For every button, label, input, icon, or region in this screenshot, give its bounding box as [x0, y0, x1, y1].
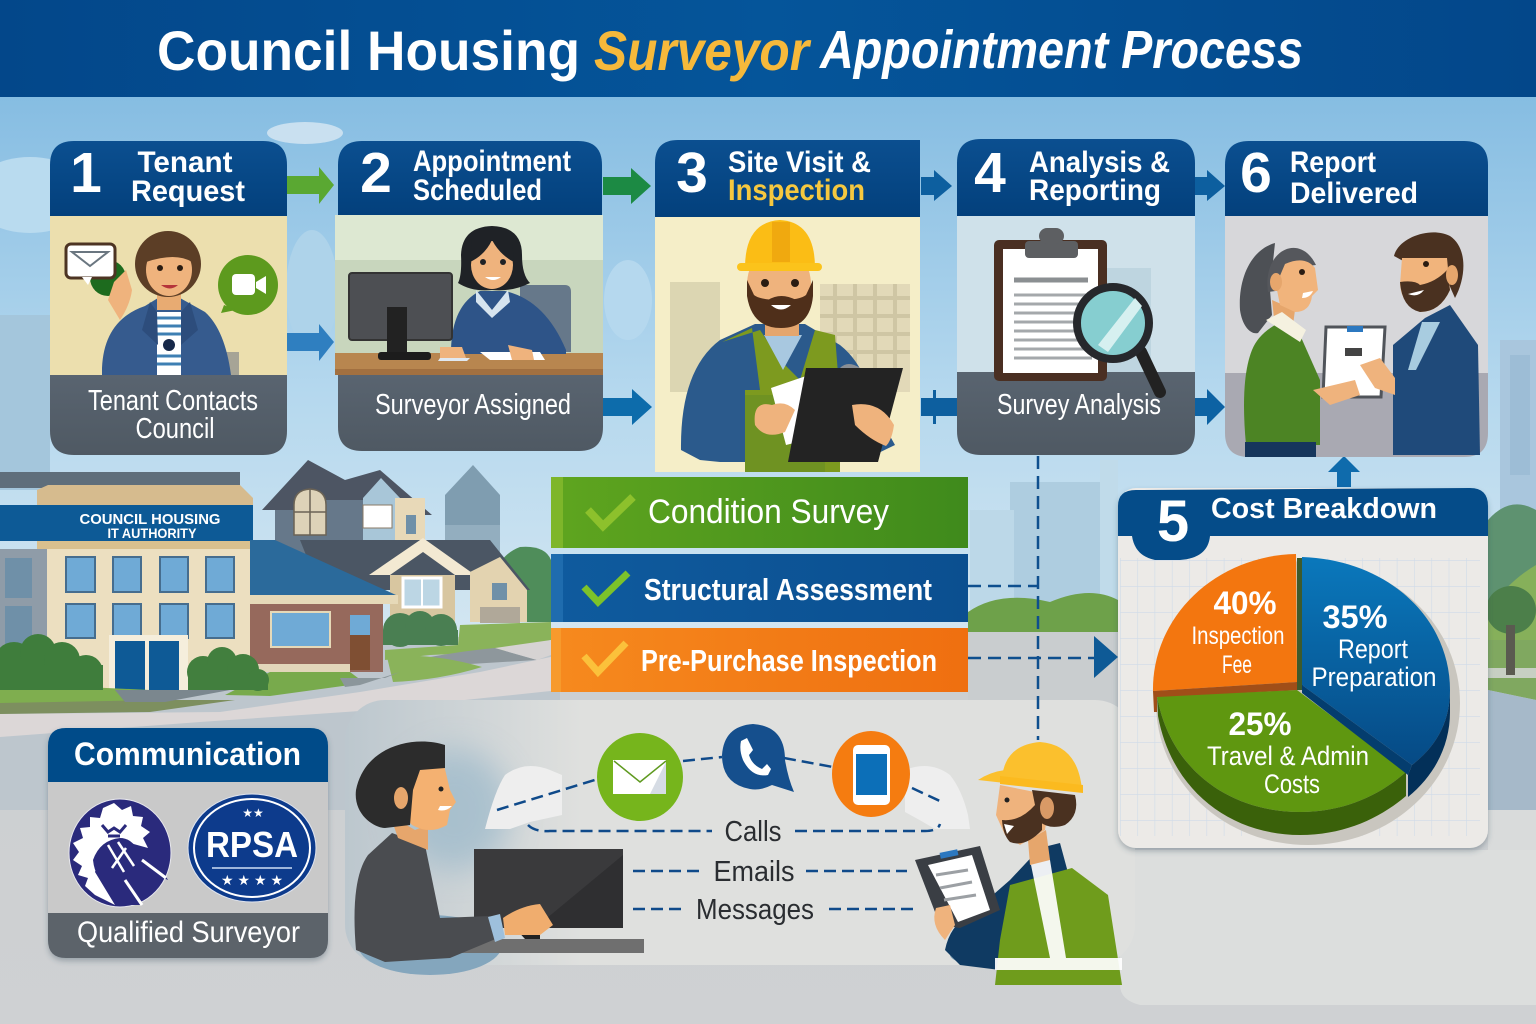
- step title: [728, 146, 871, 207]
- sign text: [80, 511, 220, 541]
- step number 5: 5: [1157, 489, 1189, 554]
- panel: inspection type list: [551, 477, 968, 692]
- title banner: [0, 0, 1536, 97]
- panel: step 2 appointment scheduled: [335, 141, 603, 451]
- step number 1: 1: [70, 141, 102, 205]
- road: [0, 637, 560, 810]
- step title: Analysis &: [1029, 146, 1170, 179]
- step title: [131, 146, 245, 208]
- badge: RPSA: RPSA: [206, 824, 298, 865]
- step number 2: 2: [360, 141, 392, 205]
- icon: surveyor at desk: [335, 226, 603, 375]
- caption: Tenant Contacts: [88, 385, 258, 417]
- pie labels: Inspection: [1192, 622, 1284, 650]
- illustration: council building and houses: [0, 460, 551, 703]
- structural assessment bar: Structural Assessment: [644, 572, 932, 607]
- panel: step 4 analysis and reporting: [957, 139, 1195, 455]
- step number 6: 6: [1240, 141, 1272, 205]
- sign text: COUNCIL HOUSING: [80, 511, 220, 528]
- structural assessment bar: [551, 554, 968, 622]
- channel labels: [696, 816, 814, 926]
- lawns and path: [385, 622, 551, 682]
- step title: Delivered: [1290, 177, 1418, 210]
- heading: Cost Breakdown: [1211, 493, 1437, 525]
- pie slice: report preparation: [1302, 557, 1450, 765]
- lower houses: [300, 538, 530, 623]
- step title: Reporting: [1029, 174, 1161, 207]
- step title: Report: [1290, 146, 1376, 179]
- arrow: step 2 to 3 bottom: [603, 389, 652, 425]
- arrow: step 5 up to 6: [1328, 456, 1360, 487]
- bottom right light panel: [1120, 850, 1536, 1005]
- pie labels: Travel & Admin: [1207, 741, 1369, 771]
- arrow: step 4 to 6 bottom: [1195, 389, 1225, 425]
- pre-purchase inspection bar: [551, 628, 968, 692]
- pie labels: Fee: [1222, 651, 1252, 679]
- channel labels: Messages: [696, 894, 814, 926]
- title banner: Council Housing: [157, 19, 580, 82]
- channel labels: Calls: [724, 816, 782, 848]
- step title: Tenant: [138, 146, 233, 179]
- condition survey bar: [551, 477, 968, 548]
- caption: [88, 385, 258, 445]
- caption: Qualified Surveyor: [77, 916, 300, 949]
- panel: communication and qualified surveyor: [48, 728, 328, 958]
- caption: Surveyor Assigned: [375, 389, 571, 421]
- pie labels: Costs: [1264, 769, 1320, 799]
- pie labels: Preparation: [1312, 662, 1436, 692]
- arrow: step 1 to 2 bottom: [287, 324, 334, 361]
- council building: [0, 472, 398, 690]
- dashed connectors: [968, 456, 1096, 740]
- step number 4: 4: [974, 141, 1006, 205]
- illustration: communication channels: [354, 724, 1122, 985]
- icon: surveyor with clipboard: [681, 220, 903, 472]
- arrow: step 1 to 2 top: [287, 167, 334, 204]
- badge: surveyor emblem: [69, 799, 171, 907]
- title banner: Appointment Process: [818, 20, 1303, 80]
- icon: email: [597, 733, 683, 821]
- step title: Appointment: [413, 145, 571, 178]
- person at computer: [354, 741, 644, 975]
- step title: [1290, 146, 1418, 210]
- upper house: [262, 460, 432, 560]
- pie slice: inspection fee: [1153, 554, 1297, 691]
- pie slice: travel and admin: [1157, 690, 1406, 812]
- icon: clipboard and magnifier: [994, 228, 1160, 392]
- dashed contact lines: [497, 757, 942, 909]
- panel: step 1 tenant request: [50, 141, 287, 455]
- faded speech bubbles: [485, 766, 970, 829]
- badge: RPSA: ★★: [242, 806, 264, 820]
- panel: step 6 report delivered: [1225, 141, 1488, 457]
- step title: [413, 145, 571, 207]
- sign text: IT AUTHORITY: [108, 525, 197, 541]
- title banner: Surveyor: [594, 19, 812, 82]
- front lawn and bushes: [0, 634, 400, 703]
- worker with tablet: [915, 742, 1122, 985]
- pre-purchase inspection bar: Pre-Purchase Inspection: [641, 643, 937, 678]
- badge: RPSA: ★★★★: [221, 872, 283, 888]
- arrow: step 2 to 3 top: [603, 168, 651, 204]
- arrow: step 3 to 4 bottom: [921, 390, 957, 424]
- pie labels: 35%: [1322, 599, 1388, 635]
- pie labels: 40%: [1214, 585, 1276, 621]
- step number 3: 3: [676, 141, 708, 205]
- icon: handing over the report: [1240, 232, 1480, 457]
- building windows: [66, 557, 234, 638]
- arrow: step 3 to 4 top: [921, 170, 952, 201]
- step title: Inspection: [728, 174, 865, 207]
- caption: Survey Analysis: [997, 389, 1161, 421]
- bush: [383, 611, 458, 647]
- arrow: to cost breakdown: [1094, 636, 1118, 678]
- arrow: step 4 to 6 top: [1195, 170, 1225, 201]
- condition survey bar: Condition Survey: [648, 493, 889, 531]
- badge: RPSA: [188, 794, 316, 902]
- step title: Request: [131, 175, 245, 208]
- panel: step 5 cost breakdown: [1118, 488, 1488, 848]
- pie labels: [1192, 585, 1436, 799]
- pie labels: Report: [1338, 634, 1408, 664]
- step title: Site Visit &: [728, 146, 871, 179]
- pie chart: [1153, 554, 1460, 845]
- icon: phone call: [722, 724, 794, 792]
- icon: tenant on the phone: [66, 231, 278, 375]
- heading: Communication: [74, 736, 301, 772]
- step title: [1029, 146, 1170, 207]
- step title: Scheduled: [413, 174, 542, 207]
- pie labels: 25%: [1228, 706, 1292, 742]
- icon: smartphone: [832, 731, 910, 817]
- panel: step 3 site visit and inspection: [655, 140, 920, 472]
- channel labels: Emails: [714, 856, 794, 888]
- caption: Council: [136, 413, 214, 445]
